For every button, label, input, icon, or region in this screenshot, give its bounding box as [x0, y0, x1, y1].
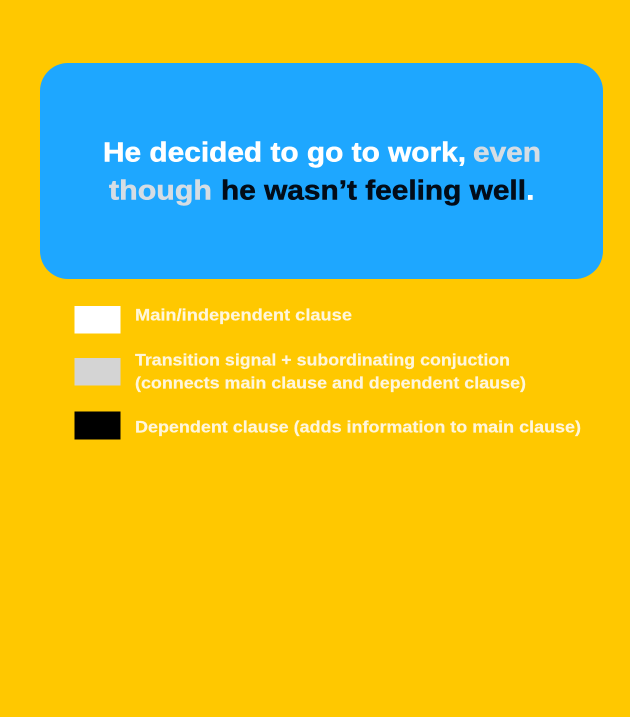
legend label: dependent clause: Dependent clause (adds information to main clause) [135, 418, 581, 436]
text: transition signal, second line: though [109, 174, 212, 206]
legend label: main clause: Main/independent clause [135, 306, 352, 324]
text: transition signal, first line: even [473, 136, 541, 168]
panel: example sentence [40, 63, 603, 279]
text: dependent clause: he wasn’t feeling well [221, 174, 526, 206]
legend swatch: white [74, 306, 120, 334]
legend [74, 306, 581, 440]
legend label: transition signal: (connects main clause and dependent clause) [135, 374, 526, 392]
text: main clause: He decided to go to work, [103, 136, 466, 168]
legend swatch: grey [74, 358, 120, 386]
legend swatch: black [74, 412, 120, 440]
legend label: transition signal: Transition signal + subordinating conjuction [135, 352, 510, 370]
text: full stop: . [526, 174, 534, 206]
legend label: transition signal [135, 352, 526, 392]
